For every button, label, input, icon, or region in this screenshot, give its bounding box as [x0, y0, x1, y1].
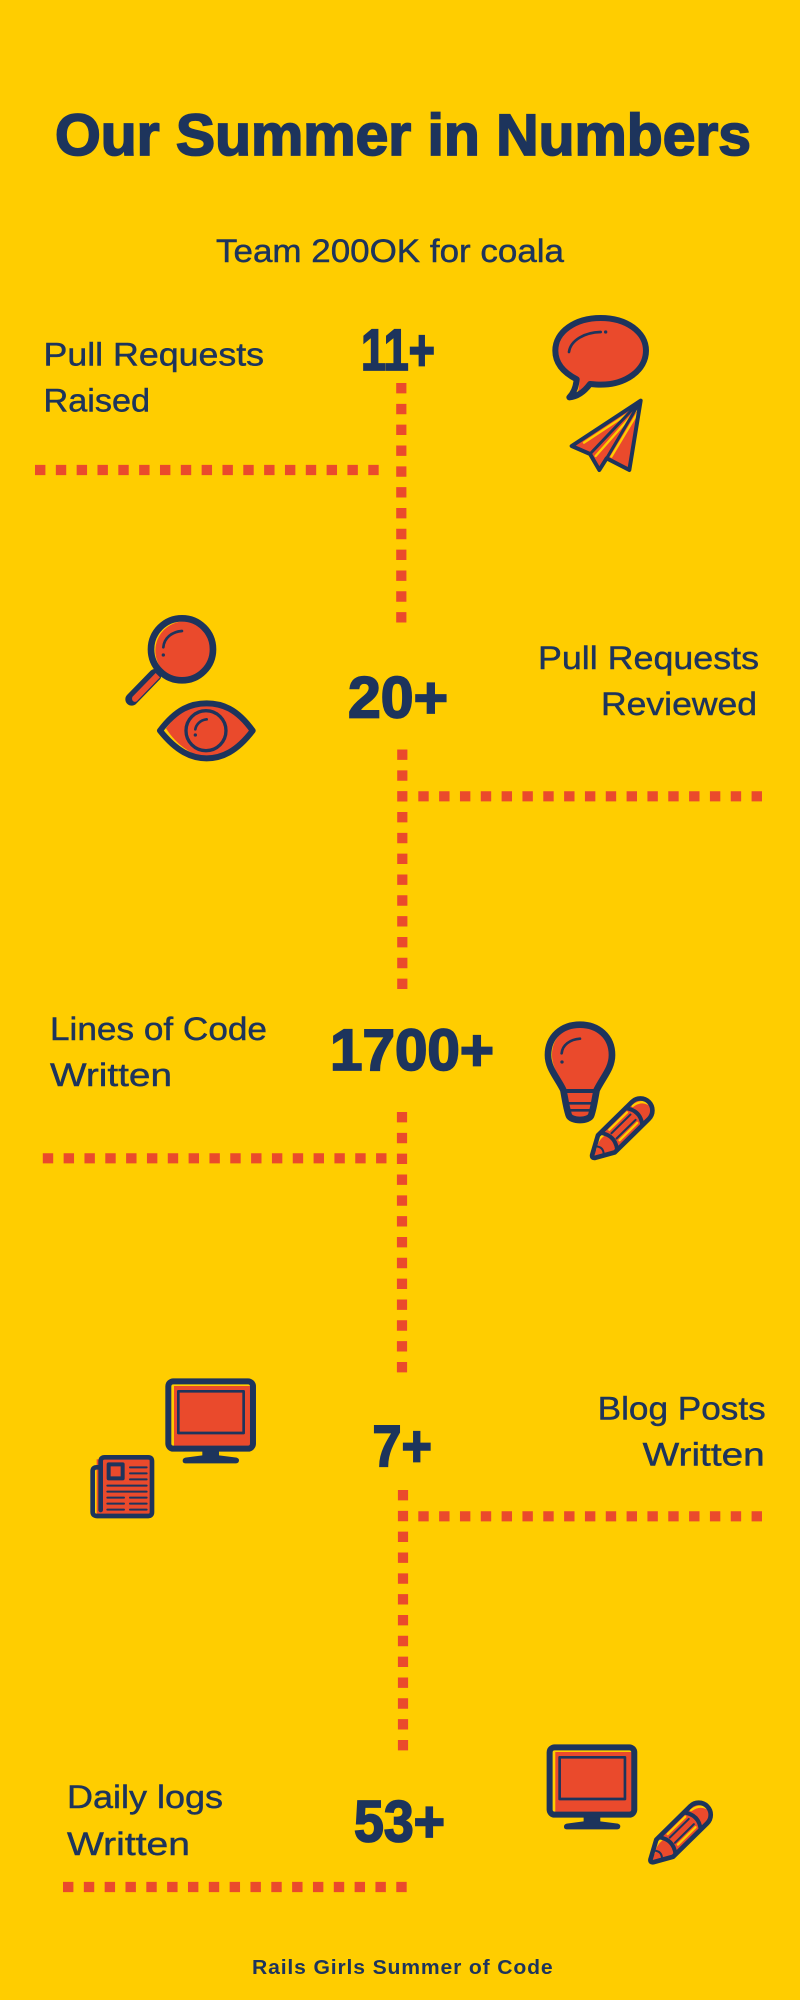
label: lines of code written: Lines of Code [50, 1011, 267, 1047]
icon: paper plane [572, 401, 641, 470]
number: 53+: 53+ [354, 1790, 445, 1855]
label: pull requests reviewed: Pull Requests [538, 640, 759, 676]
label: lines of code written: Written [50, 1057, 172, 1093]
icon: speech bubble [555, 318, 646, 398]
icon: pencil [584, 1093, 657, 1166]
horizontal dotted line [418, 791, 762, 801]
vertical dotted line [397, 1112, 407, 1373]
label: pull requests raised: Raised [44, 383, 150, 419]
horizontal dotted line [418, 1511, 762, 1521]
icon: monitor [550, 1747, 634, 1829]
number: 11+: 11+ [361, 318, 435, 383]
horizontal dotted line [35, 465, 379, 475]
panel: blog posts written [93, 1381, 766, 1751]
horizontal dotted line [43, 1153, 387, 1163]
footer: Rails Girls Summer of Code [252, 1957, 554, 1979]
label: daily logs written: Written [67, 1826, 190, 1862]
number: 1700+: 1700+ [330, 1018, 494, 1083]
subtitle: Team 200OK for coala [216, 233, 565, 269]
label: blog posts written: Written [643, 1437, 765, 1473]
icon: pencil [643, 1798, 716, 1870]
icon: magnifying glass [132, 618, 214, 702]
label: blog posts written: Blog Posts [598, 1391, 766, 1427]
icon: light bulb [548, 1025, 612, 1120]
number: 20+: 20+ [348, 666, 448, 731]
icon: eye [160, 703, 253, 758]
horizontal dotted line [63, 1882, 408, 1892]
vertical dotted line [398, 1490, 408, 1751]
vertical dotted line [396, 383, 406, 632]
icon: newspaper [93, 1457, 153, 1516]
icon: monitor [168, 1381, 253, 1463]
vertical dotted line [397, 750, 407, 990]
panel: daily logs written [63, 1747, 716, 1887]
number: 7+: 7+ [372, 1414, 432, 1479]
label: pull requests raised: Pull Requests [44, 337, 264, 373]
panel: pull requests reviewed [132, 618, 763, 990]
label: pull requests reviewed: Reviewed [601, 686, 757, 722]
panel: pull requests raised [35, 318, 646, 632]
title: Our Summer in Numbers [55, 103, 751, 168]
panel: lines of code written [43, 1011, 657, 1373]
label: daily logs written: Daily logs [67, 1779, 223, 1815]
